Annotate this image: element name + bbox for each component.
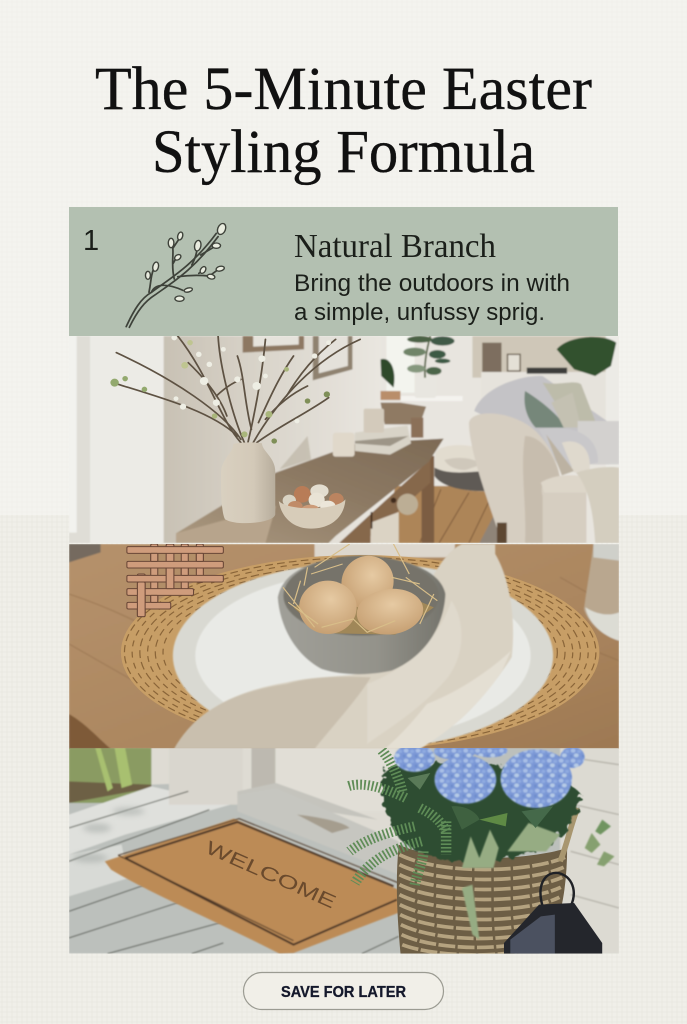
dappled sunlight (73, 807, 144, 863)
porch deck (69, 748, 561, 954)
dog bed (435, 445, 489, 491)
title (95, 56, 592, 186)
straw and eggs in bowl (283, 544, 437, 639)
step heading: Natural Branch (294, 228, 496, 265)
photo: place setting with woven placemat (69, 544, 619, 750)
potted plants (381, 336, 455, 400)
egg bowl (279, 484, 345, 529)
ceramic vase (221, 442, 275, 523)
dinner plate (173, 562, 553, 749)
mat lettering: WELCOME (202, 837, 339, 913)
branches in vase (116, 336, 360, 443)
throw blanket (576, 467, 619, 543)
step description: a simple, unfussy sprig. (294, 299, 545, 326)
grey bowl (278, 557, 445, 674)
step description: Bring the outdoors in with (294, 270, 570, 297)
panel: step 1 natural branch (69, 207, 618, 336)
title: Styling Formula (152, 119, 535, 186)
left wall and window frame (90, 336, 163, 542)
back side table (381, 403, 426, 424)
sunlit deck patch (69, 786, 230, 855)
books and candle (355, 425, 411, 455)
black lantern (504, 873, 602, 954)
button: save for later (244, 972, 444, 1010)
basket (397, 808, 578, 955)
button: save for later: SAVE FOR LATER (281, 984, 406, 1001)
vase shadow (279, 436, 311, 469)
siding and door (150, 748, 403, 846)
glass of water (584, 547, 619, 628)
back room (381, 336, 619, 543)
hydrangea blooms (394, 743, 585, 808)
woven placemat (121, 555, 599, 750)
picture frames (243, 336, 304, 353)
table top (176, 439, 444, 543)
sofa (474, 376, 606, 442)
photo: console table with branch vase and eggs (69, 335, 619, 543)
doormat (105, 819, 402, 954)
photo: porch with welcome mat and hydrangea basket (69, 743, 619, 955)
armchair (469, 413, 586, 543)
plant foliage (348, 750, 614, 940)
icon: woven texture (127, 544, 223, 617)
table legs and drawer (422, 456, 434, 543)
step description (294, 270, 570, 326)
step number: 1 (83, 225, 99, 257)
title: The 5-Minute Easter (95, 56, 592, 123)
napkin (228, 544, 514, 748)
garden (69, 748, 151, 803)
floor (393, 485, 494, 543)
icon: branch sprig (126, 222, 227, 327)
